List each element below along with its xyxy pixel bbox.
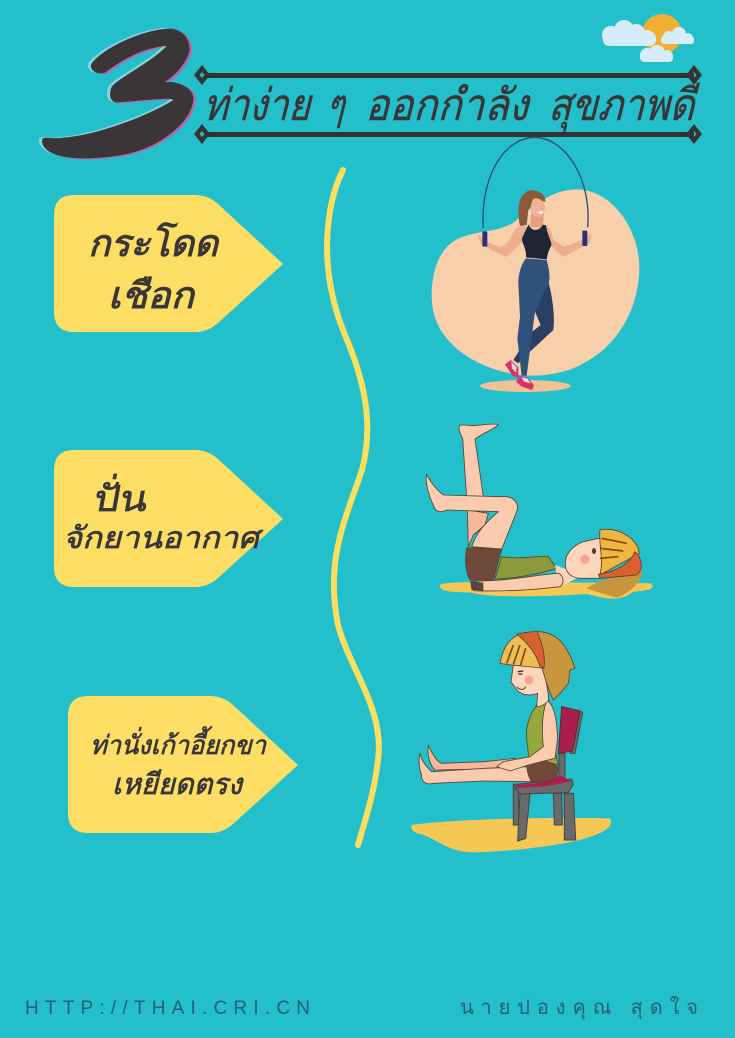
panel: jump rope label [54,195,283,332]
illustration: woman jumping rope [432,137,639,392]
panel: seated leg raise label [68,696,298,833]
title text: สุขภาพดี [545,82,704,132]
label text: jump rope: กระโดด [86,223,226,264]
title text: ท่าง่าย [201,82,320,130]
divider: wavy yellow line [327,170,379,845]
title frame [194,65,702,144]
title numeral 3 [39,28,196,159]
label text: air cycling: ปั่น [91,474,152,519]
label text: jump rope: เชือก [106,275,202,316]
label text: jump rope [86,223,226,316]
label text: air cycling: จักยานอากาศ [61,521,266,555]
panel: cycling label [54,450,283,587]
label text: seated leg raise: ท่านั่งเก้าอี้ยกขา [89,726,273,760]
title text: ๆ [324,82,354,130]
footer: website url: HTTP://THAI.CRI.CN [25,998,310,1019]
footer: author name: นายปองคุณ สุดใจ [460,996,698,1020]
icon: sun and clouds [602,14,694,62]
title text: ออกกำลัง [363,82,538,130]
label text: air cycling [61,474,266,555]
title text [201,82,704,132]
illustration: woman lying and cycling legs [426,424,652,599]
illustration: woman seated on chair with legs extended [411,631,611,852]
label text: seated leg raise [89,726,273,801]
label text: seated leg raise: เหยียดตรง [110,768,248,801]
